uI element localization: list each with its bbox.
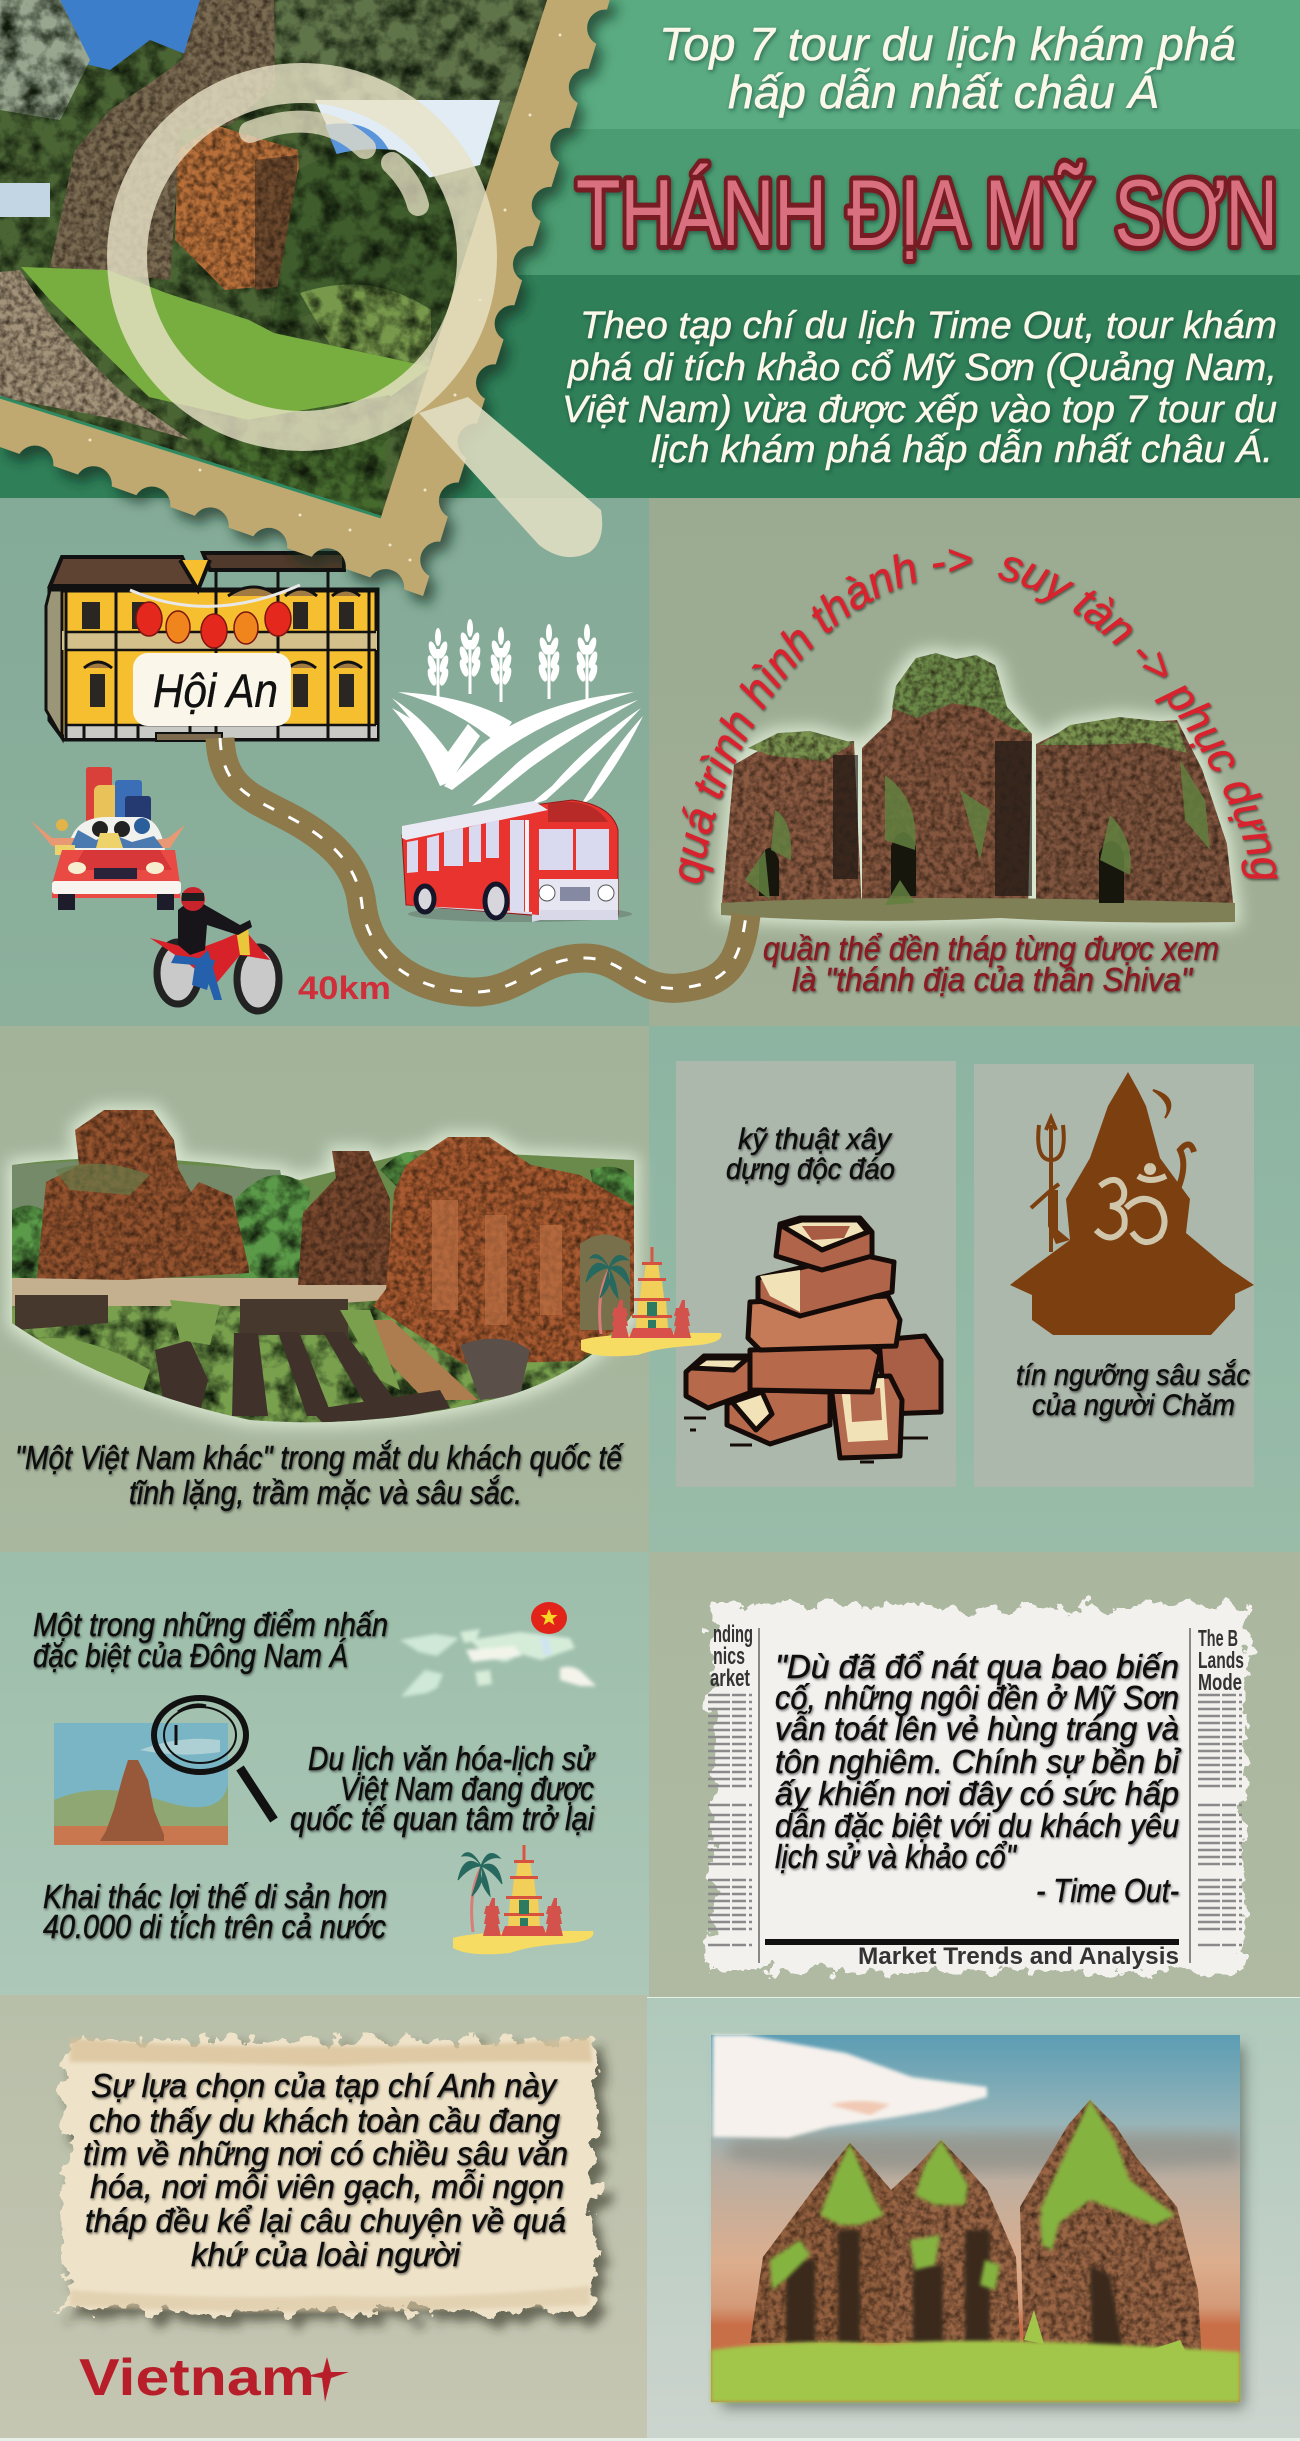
image: tower under magnifier: [54, 1698, 274, 1845]
torn newspaper quote: [708, 1606, 1246, 1971]
caption: Another Vietnam: "Một Việt Nam khác" trong mắt du khách quốc tế: [15, 1439, 624, 1476]
note text: cho thấy du khách toàn cầu đang: [89, 2102, 561, 2139]
quote text: vẫn toát lên vẻ hùng tráng và: [775, 1710, 1179, 1747]
card: construction technique: dựng độc đáo: [726, 1153, 895, 1186]
panel: row 3 right cards: [649, 1026, 1300, 1552]
text: cultural tourism: Du lịch văn hóa-lịch sử: [308, 1740, 596, 1777]
caption: Another Vietnam: tĩnh lặng, trầm mặc và sâu sắc.: [129, 1474, 522, 1511]
newspaper side columns: The B: [1198, 1625, 1238, 1651]
panel: row 3 left photo: [0, 1026, 721, 1552]
text: cultural tourism: Việt Nam đang được: [340, 1770, 594, 1807]
card: construction technique: [676, 1061, 956, 1487]
card: Cham belief: [974, 1064, 1254, 1487]
panel: row 5 left closing text: [0, 1995, 647, 2438]
newspaper side columns: Lands: [1198, 1647, 1244, 1673]
quote text: - Time Out-: [1036, 1872, 1179, 1909]
intro text: [562, 305, 1277, 471]
newspaper side columns: nding: [713, 1621, 753, 1648]
quote text: [775, 1648, 1182, 1909]
icon: Hoi An yellow building: [46, 553, 377, 741]
note text: khứ của loài người: [191, 2236, 462, 2273]
note text: Sự lựa chọn của tạp chí Anh này: [91, 2067, 558, 2104]
text: heritage advantage: [43, 1878, 387, 1945]
icon: world map with Vietnam pin: [400, 1602, 596, 1697]
magnifier overlay: [127, 83, 602, 557]
stamp paper flecks: [88, 34, 562, 562]
newspaper side columns: arket: [710, 1665, 750, 1692]
caption: Another Vietnam: [15, 1439, 624, 1511]
quote text: cố, những ngôi đền ở Mỹ Sơn: [775, 1679, 1179, 1716]
title: Top 7 tours: hấp dẫn nhất châu Á: [728, 66, 1159, 118]
green title bands: [0, 0, 1300, 498]
quote text: ấy khiến nơi đây có sức hấp: [775, 1775, 1179, 1812]
note text: tìm về những nơi có chiều sâu văn: [83, 2135, 568, 2172]
icon: Shiva silhouette with Om: [1010, 1072, 1254, 1335]
icon: brick stack: [684, 1218, 941, 1462]
text: Southeast Asia highlight: [33, 1606, 388, 1674]
text: heritage advantage: Khai thác lợi thế di sản hơn: [43, 1878, 387, 1915]
text: cultural tourism: quốc tế quan tâm trở lại: [290, 1800, 595, 1837]
text: Southeast Asia highlight: đặc biệt của Đông Nam Á: [33, 1637, 348, 1674]
newspaper side columns: [708, 1621, 1244, 1970]
intro text: lịch khám phá hấp dẫn nhất châu Á.: [651, 428, 1273, 471]
note text: [83, 2067, 568, 2273]
label: Hoi An: [133, 653, 291, 726]
stamp with photo: [0, 0, 611, 596]
icon: red bus: [402, 800, 632, 922]
panel: header: [0, 0, 1300, 596]
title: Top 7 tours: [659, 18, 1236, 118]
note text: hóa, nơi mỗi viên gạch, mỗi ngọn: [90, 2168, 564, 2205]
road from Hoi An to My Son: [220, 738, 746, 992]
newspaper side columns: Mode: [1198, 1669, 1242, 1695]
quote text: lịch sử và khảo cổ": [775, 1838, 1017, 1875]
label: 40km: 40km: [298, 970, 391, 1006]
lanterns: [136, 602, 291, 648]
icon: magnifier: [154, 1698, 274, 1820]
panel: route panel left: [0, 497, 649, 1026]
icon: palm and pagoda: [453, 1845, 593, 1954]
text: cultural tourism: [290, 1740, 596, 1837]
temple ruins photo: [12, 1110, 634, 1430]
intro text: Theo tạp chí du lịch Time Out, tour khám: [580, 305, 1277, 347]
illustration: My Son towers: [711, 2035, 1244, 2408]
newspaper side columns: Market Trends and Analysis: [858, 1943, 1179, 1970]
quote text: tôn nghiêm. Chính sự bền bỉ: [775, 1743, 1182, 1780]
panel: route panel right with temple: [649, 498, 1300, 1026]
temple caption: là "thánh địa của thần Shiva": [792, 961, 1193, 998]
card: construction technique: kỹ thuật xây: [738, 1123, 893, 1156]
curved heading: process: quá trình hình thành -> suy tàn -> phục dựng: [678, 548, 1280, 886]
panel: row 4 right newspaper: [649, 1552, 1300, 1997]
torn paper note: [64, 2038, 594, 2312]
icon: motorbike rider: [150, 887, 279, 1011]
photo: brick tower and garden: [0, 0, 560, 520]
logo: Vietnam+: Vietnam: [79, 2349, 315, 2407]
newspaper side columns: nics: [713, 1643, 745, 1670]
temple complex photo: [721, 653, 1235, 922]
intro text: phá di tích khảo cổ Mỹ Sơn (Quảng Nam,: [567, 347, 1277, 389]
card: Cham belief: của người Chăm: [1032, 1389, 1235, 1422]
icon: red car with luggage and passengers: [30, 767, 185, 910]
quote text: dẫn đặc biệt với du khách yêu: [775, 1807, 1179, 1844]
temple caption: [763, 930, 1219, 998]
label: Hoi An: Hội An: [153, 664, 278, 717]
intro text: Việt Nam) vừa được xếp vào top 7 tour du: [562, 389, 1277, 431]
text: Southeast Asia highlight: Một trong những điểm nhấn: [33, 1606, 388, 1643]
note text: tháp đều kể lại câu chuyện về quá: [85, 2202, 566, 2239]
quote text: "Dù đã đổ nát qua bao biến: [775, 1648, 1179, 1685]
temple caption: quần thể đền tháp từng được xem: [763, 930, 1219, 967]
text: heritage advantage: 40.000 di tích trên cả nước: [43, 1908, 386, 1945]
icon: palm and pagoda: [581, 1247, 721, 1356]
icon: white rice fields and wheat: [392, 619, 643, 806]
panel: row 4 left key points: [0, 1552, 649, 1997]
title: Top 7 tours: Top 7 tour du lịch khám phá: [659, 18, 1236, 70]
panel: row 5 right illustration: [647, 1998, 1300, 2438]
card: Cham belief: tín ngưỡng sâu sắc: [1016, 1359, 1250, 1392]
